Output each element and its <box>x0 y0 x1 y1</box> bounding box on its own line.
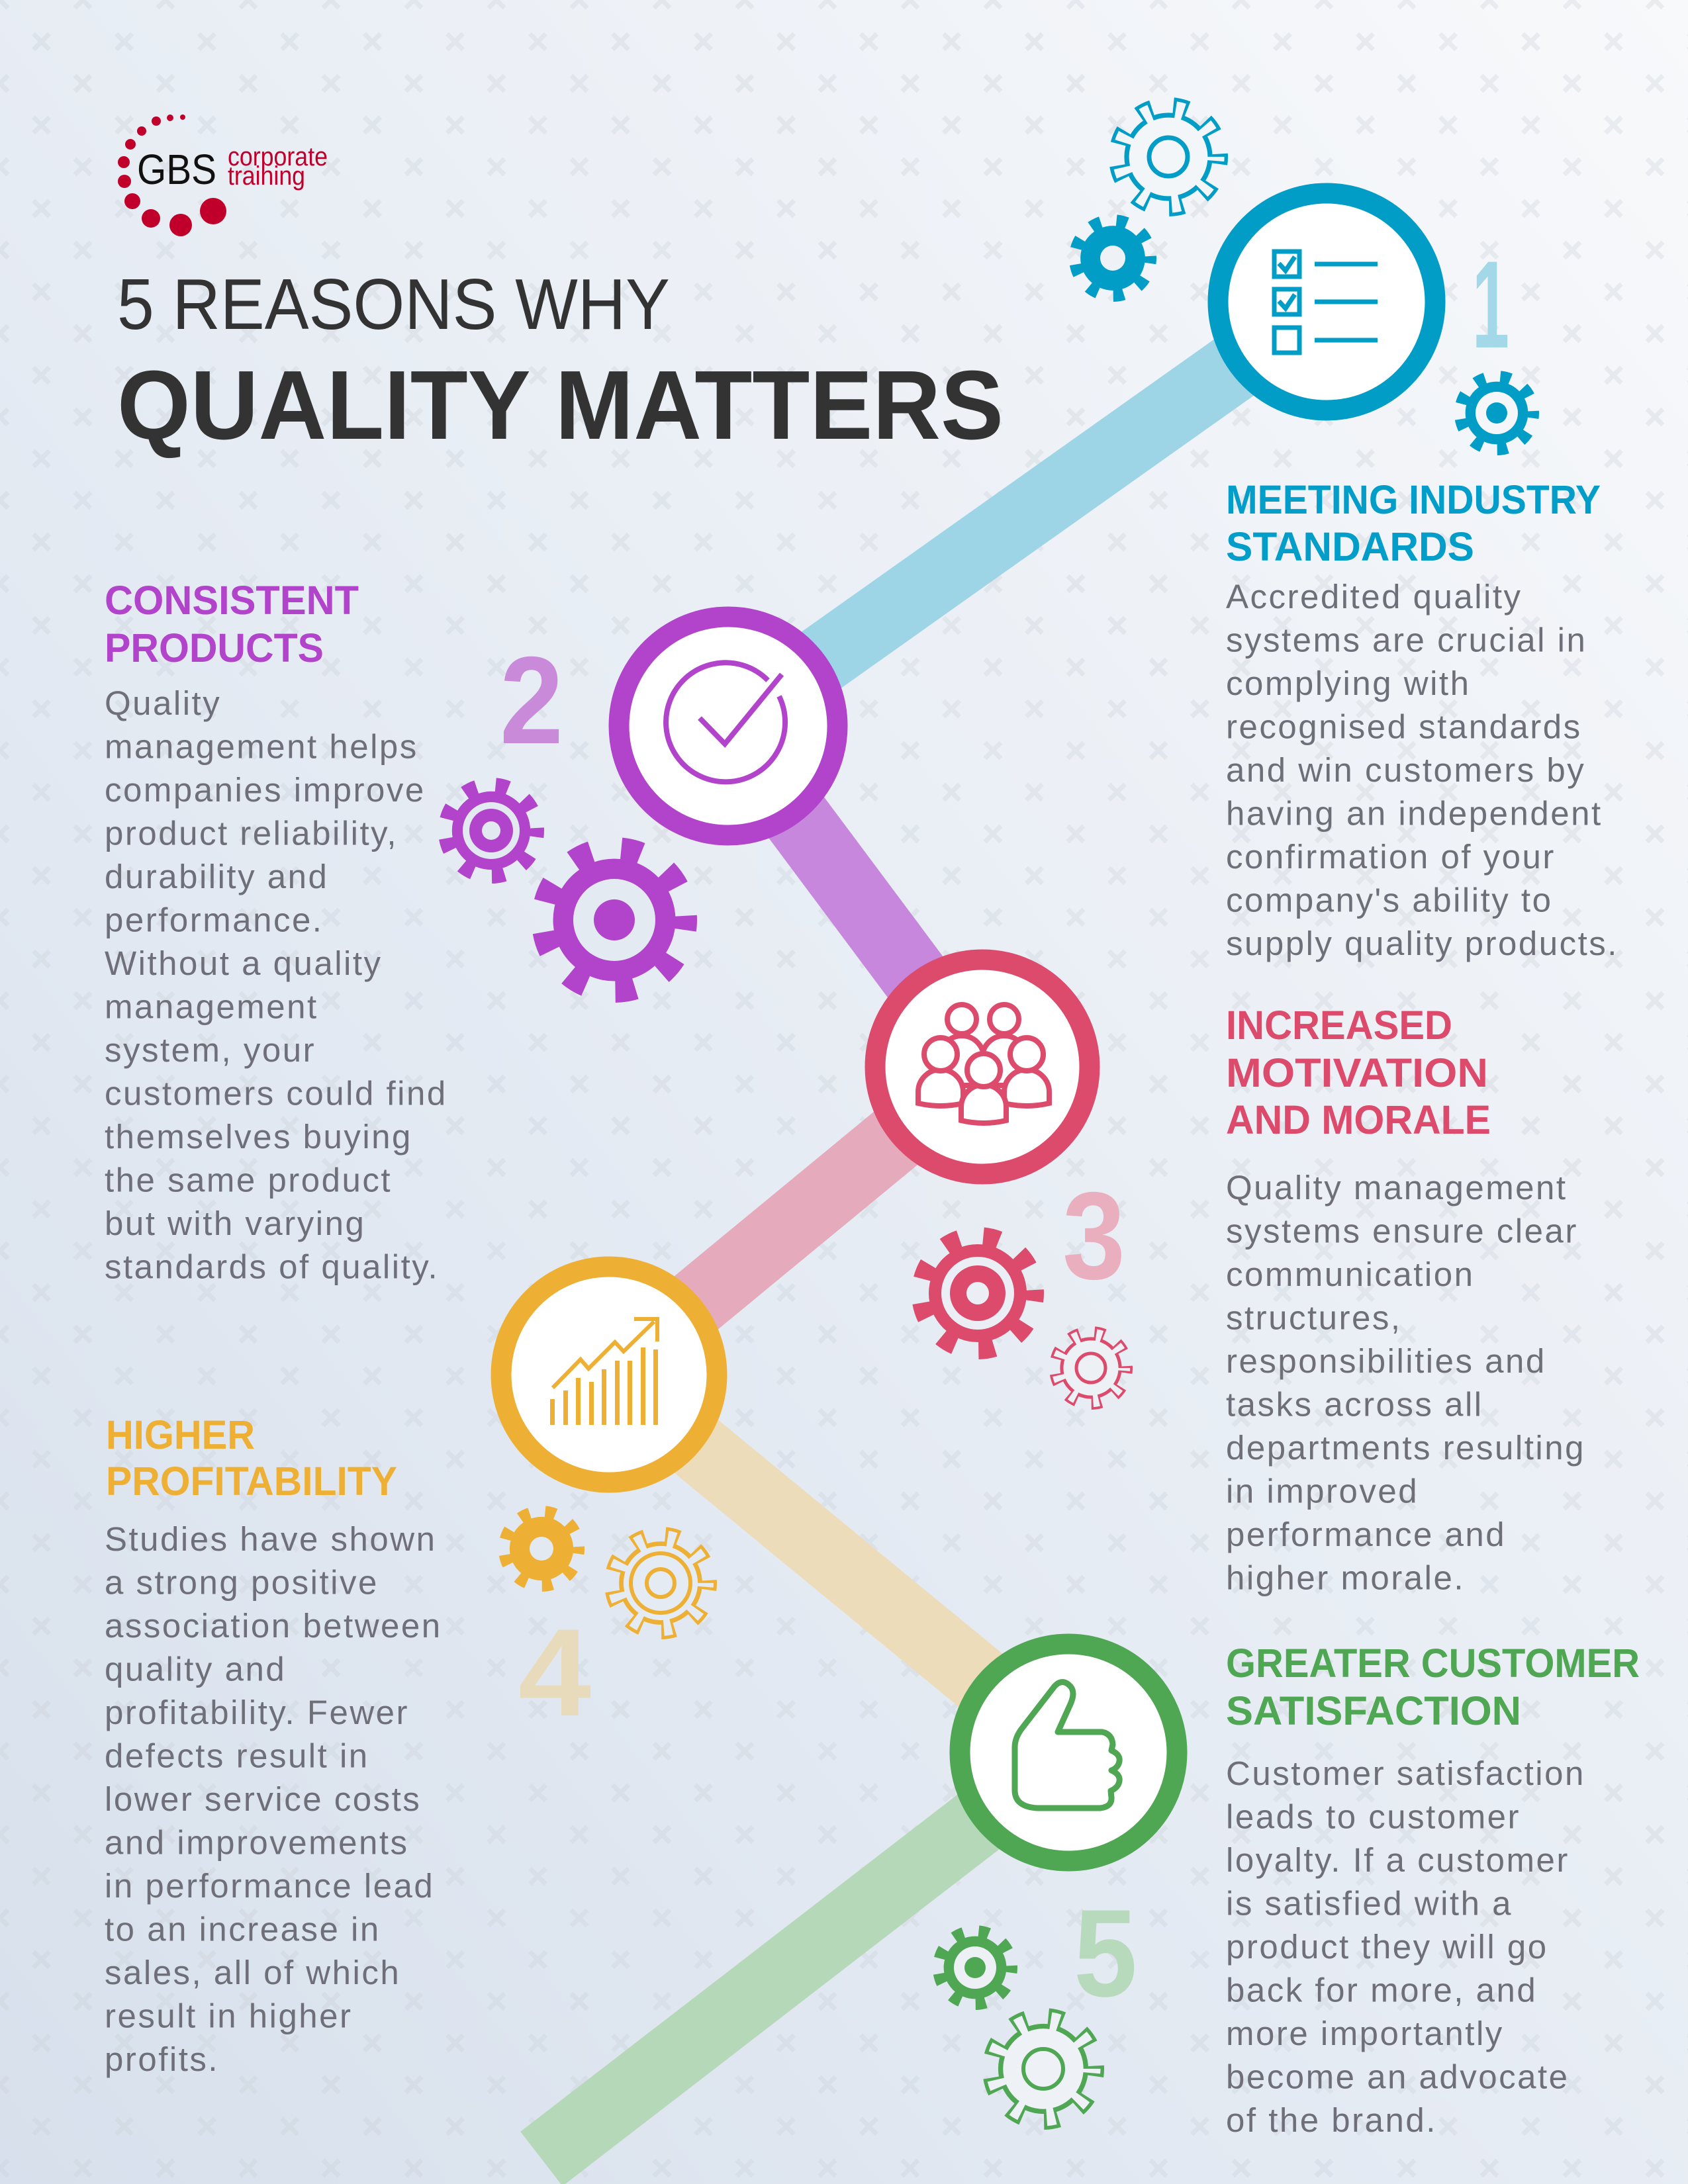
title: 5 REASONS WHY <box>117 264 670 345</box>
text block 5: greater customer satisfaction: back for more, and <box>1226 1971 1537 2009</box>
gears: green <box>939 1931 1096 2121</box>
text block 1: meeting industry standards: recognised standards <box>1226 708 1582 745</box>
text block 2: consistent products: management helps <box>105 728 418 765</box>
text block 3: increased motivation and morale: INCREASED <box>1226 1003 1452 1048</box>
number 5: 5 <box>1074 1884 1137 2023</box>
text block 3: increased motivation and morale: MOTIVATION <box>1226 1050 1488 1095</box>
step 3 circle: people icon <box>875 960 1090 1174</box>
text block 1: meeting industry standards: complying with <box>1226 664 1470 702</box>
text block 4: higher profitability: and improvements <box>105 1824 409 1861</box>
text block 1: meeting industry standards: company's ability to <box>1226 882 1552 919</box>
text block 4: higher profitability: quality and <box>105 1651 286 1688</box>
step 5 circle: thumbs up icon <box>960 1644 1177 1861</box>
text block 2: consistent products: management <box>105 987 318 1026</box>
text block 4: higher profitability: in performance lead <box>105 1867 434 1905</box>
text block 3: increased motivation and morale: departments resulting <box>1226 1429 1585 1467</box>
text block 2: consistent products: PRODUCTS <box>105 625 324 670</box>
text block 4: higher profitability: profits. <box>105 2040 219 2078</box>
text block 3: increased motivation and morale: Quality management <box>1226 1169 1568 1206</box>
text block 2: consistent products: product reliability, <box>105 814 398 852</box>
text block 5: greater customer satisfaction <box>1226 1641 1640 2139</box>
text block 4: higher profitability: to an increase in <box>105 1910 381 1948</box>
text block 2: consistent products: standards of quality. <box>105 1248 439 1285</box>
text block 3: increased motivation and morale <box>1226 1003 1585 1596</box>
text block 3: increased motivation and morale: systems ensure clear <box>1226 1212 1578 1250</box>
text block 2: consistent products: companies improve <box>105 771 426 809</box>
gears: orange <box>504 1512 709 1631</box>
text block 1: meeting industry standards: having an independent <box>1226 794 1603 833</box>
text block 4: higher profitability: defects result in <box>105 1737 369 1775</box>
text block 4: higher profitability: lower service costs <box>105 1780 421 1818</box>
text block 2: consistent products: Quality <box>105 684 221 722</box>
number 1: 1 <box>1472 235 1509 374</box>
text block 1: meeting industry standards: Accredited quality <box>1226 578 1523 615</box>
text block 2: consistent products: but with varying <box>105 1205 365 1242</box>
text block 4: higher profitability: sales, all of which <box>105 1954 400 1991</box>
text block 1: meeting industry standards: STANDARDS <box>1226 524 1474 569</box>
text block 5: greater customer satisfaction: of the brand. <box>1226 2101 1437 2139</box>
text block 2: consistent products: the same product <box>105 1161 392 1199</box>
logo: GBS corporate training: GBS <box>137 146 216 193</box>
text block 2: consistent products: Without a quality <box>105 944 383 982</box>
text block 2: consistent products <box>105 578 447 1285</box>
text block 3: increased motivation and morale: higher morale. <box>1226 1559 1465 1596</box>
text block 5: greater customer satisfaction: GREATER CUSTOMER <box>1226 1641 1640 1686</box>
text block 2: consistent products: customers could find <box>105 1075 447 1112</box>
text block 1: meeting industry standards: confirmation of your <box>1226 838 1556 876</box>
text block 4: higher profitability: HIGHER <box>106 1412 255 1457</box>
number 2: 2 <box>500 631 563 770</box>
text block 5: greater customer satisfaction: leads to customer <box>1226 1797 1521 1836</box>
text block 3: increased motivation and morale: in improved <box>1226 1472 1419 1510</box>
text block 1: meeting industry standards: MEETING INDUSTRY <box>1226 477 1601 522</box>
text block 4: higher profitability: profitability. Fewer <box>105 1694 409 1731</box>
number 4: 4 <box>518 1603 591 1742</box>
text block 1: meeting industry standards: supply quality products. <box>1226 925 1618 962</box>
text block 3: increased motivation and morale: structures, <box>1226 1298 1402 1337</box>
text block 2: consistent products: system, your <box>105 1031 316 1069</box>
text block 5: greater customer satisfaction: Customer satisfaction <box>1226 1754 1585 1792</box>
logo: GBS corporate training <box>118 114 328 236</box>
title <box>117 264 1004 460</box>
text block 4: higher profitability: Studies have shown <box>105 1520 436 1558</box>
step 4 circle: growth chart icon <box>501 1267 717 1482</box>
text block 2: consistent products: themselves buying <box>105 1118 412 1156</box>
text block 3: increased motivation and morale: performance and <box>1226 1516 1506 1553</box>
text block 1: meeting industry standards: systems are crucial in <box>1226 621 1587 659</box>
text block 5: greater customer satisfaction: is satisfied with a <box>1226 1885 1513 1922</box>
gears: purple <box>445 785 686 991</box>
text block 4: higher profitability: association between <box>105 1607 442 1645</box>
title: QUALITY MATTERS <box>117 351 1004 460</box>
text block 1: meeting industry standards <box>1226 477 1618 962</box>
text block 4: higher profitability <box>105 1412 442 2078</box>
text block 4: higher profitability: PROFITABILITY <box>106 1459 397 1504</box>
text block 5: greater customer satisfaction: more importantly <box>1226 2015 1504 2052</box>
text block 5: greater customer satisfaction: product they will go <box>1226 1928 1548 1966</box>
text block 1: meeting industry standards: and win customers by <box>1226 751 1585 789</box>
text block 5: greater customer satisfaction: SATISFACTION <box>1226 1688 1521 1733</box>
text block 3: increased motivation and morale: tasks across all <box>1226 1386 1483 1423</box>
logo: GBS corporate training: training <box>228 161 305 191</box>
step 2 circle: check icon <box>619 617 837 835</box>
connecting bands <box>541 302 1327 2159</box>
text block 4: higher profitability: a strong positive <box>105 1563 379 1602</box>
text block 2: consistent products: performance. <box>105 901 323 938</box>
logo: GBS corporate training: corporate <box>228 142 328 171</box>
text block 2: consistent products: durability and <box>105 858 328 895</box>
text block 4: higher profitability: result in higher <box>105 1997 353 2034</box>
text block 2: consistent products: CONSISTENT <box>105 578 359 623</box>
step 1 circle: checklist icon <box>1218 193 1435 410</box>
text block 3: increased motivation and morale: communication <box>1226 1255 1474 1293</box>
gears: blue <box>1075 106 1533 449</box>
text block 3: increased motivation and morale: AND MORALE <box>1226 1097 1491 1142</box>
gears: red <box>921 1236 1127 1404</box>
number 3: 3 <box>1062 1166 1125 1305</box>
text block 3: increased motivation and morale: responsibilities and <box>1226 1342 1546 1380</box>
text block 5: greater customer satisfaction: loyalty. If a customer <box>1226 1841 1570 1879</box>
text block 5: greater customer satisfaction: become an advocate <box>1226 2058 1569 2095</box>
